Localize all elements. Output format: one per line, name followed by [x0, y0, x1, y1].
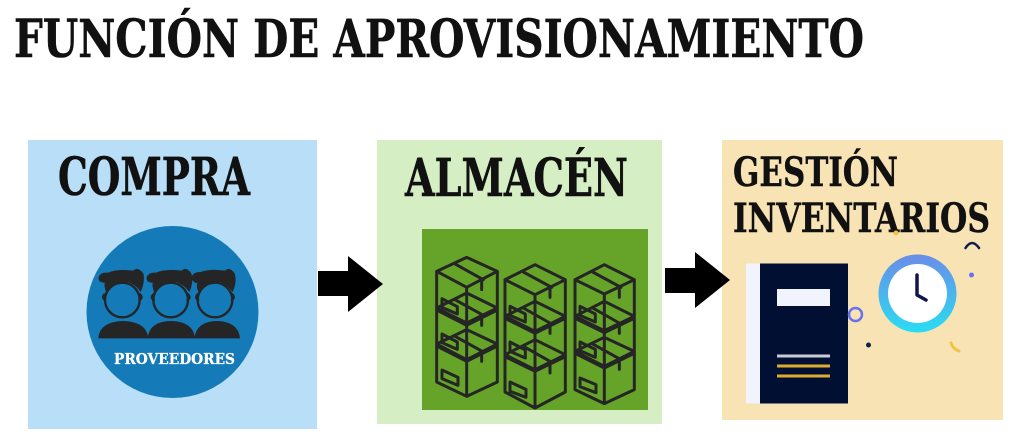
icon: book: [746, 264, 848, 404]
heading: gestión inventarios: GESTIÓN: [733, 149, 898, 196]
label: proveedores: PROVEEDORES: [114, 350, 235, 368]
icon: clock: [878, 254, 956, 332]
heading: gestión inventarios: [733, 149, 990, 242]
arrow: almacén to gestión: [665, 252, 730, 308]
icon: confetti accents: [849, 230, 979, 351]
panel: gestión inventarios: [722, 140, 1003, 420]
icon: box stacks: [422, 229, 648, 410]
arrow: compra to almacén: [318, 256, 383, 312]
icon: box stack 3: [575, 265, 634, 404]
icon: box stack 2: [505, 265, 565, 408]
panel: compra: [28, 140, 317, 429]
icon: proveedores circle: [86, 226, 258, 398]
panel: almacén: [377, 140, 662, 424]
heading: almacén: ALMACÉN: [404, 147, 628, 209]
icon: box stack 1: [437, 257, 497, 396]
icon: three suppliers: [98, 269, 240, 338]
heading: compra: COMPRA: [58, 147, 250, 208]
